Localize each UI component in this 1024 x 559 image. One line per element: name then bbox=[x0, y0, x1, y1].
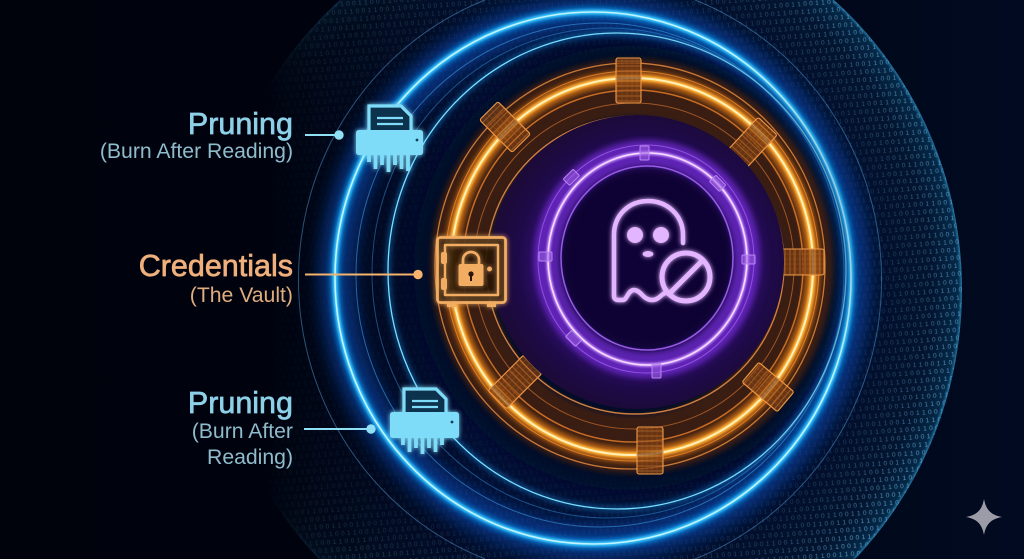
purple ring clamps bbox=[539, 146, 755, 378]
label: credentials: (The Vault) bbox=[190, 284, 293, 307]
icon: ghost with prohibition sign bbox=[614, 201, 710, 301]
connector: top pruning bbox=[305, 130, 344, 140]
connector: bottom pruning bbox=[304, 424, 376, 434]
label: pruning bottom: (Burn After bbox=[192, 420, 293, 443]
icon: vault safe bbox=[438, 238, 506, 307]
connector: credentials bbox=[305, 270, 423, 279]
outer blue ring bbox=[298, 0, 882, 559]
label: pruning bottom bbox=[188, 386, 293, 469]
data sphere bbox=[275, 0, 962, 559]
label: credentials bbox=[139, 249, 293, 307]
orange ring bbox=[435, 63, 825, 469]
label: pruning top: (Burn After Reading) bbox=[100, 140, 293, 163]
orange ring clamps bbox=[480, 58, 824, 474]
dark gap inside blue ring bbox=[414, 46, 842, 490]
label: pruning bottom: Pruning bbox=[188, 386, 293, 420]
icon: shredder bottom bbox=[390, 389, 459, 454]
label: pruning bottom: Reading) bbox=[207, 446, 293, 469]
label: pruning top bbox=[100, 107, 293, 163]
label: credentials: Credentials bbox=[139, 249, 293, 283]
label: pruning top: Pruning bbox=[188, 107, 293, 141]
icon: sparkle watermark bbox=[966, 499, 1002, 535]
icon: shredder top bbox=[356, 106, 423, 172]
central purple core bbox=[490, 115, 784, 409]
